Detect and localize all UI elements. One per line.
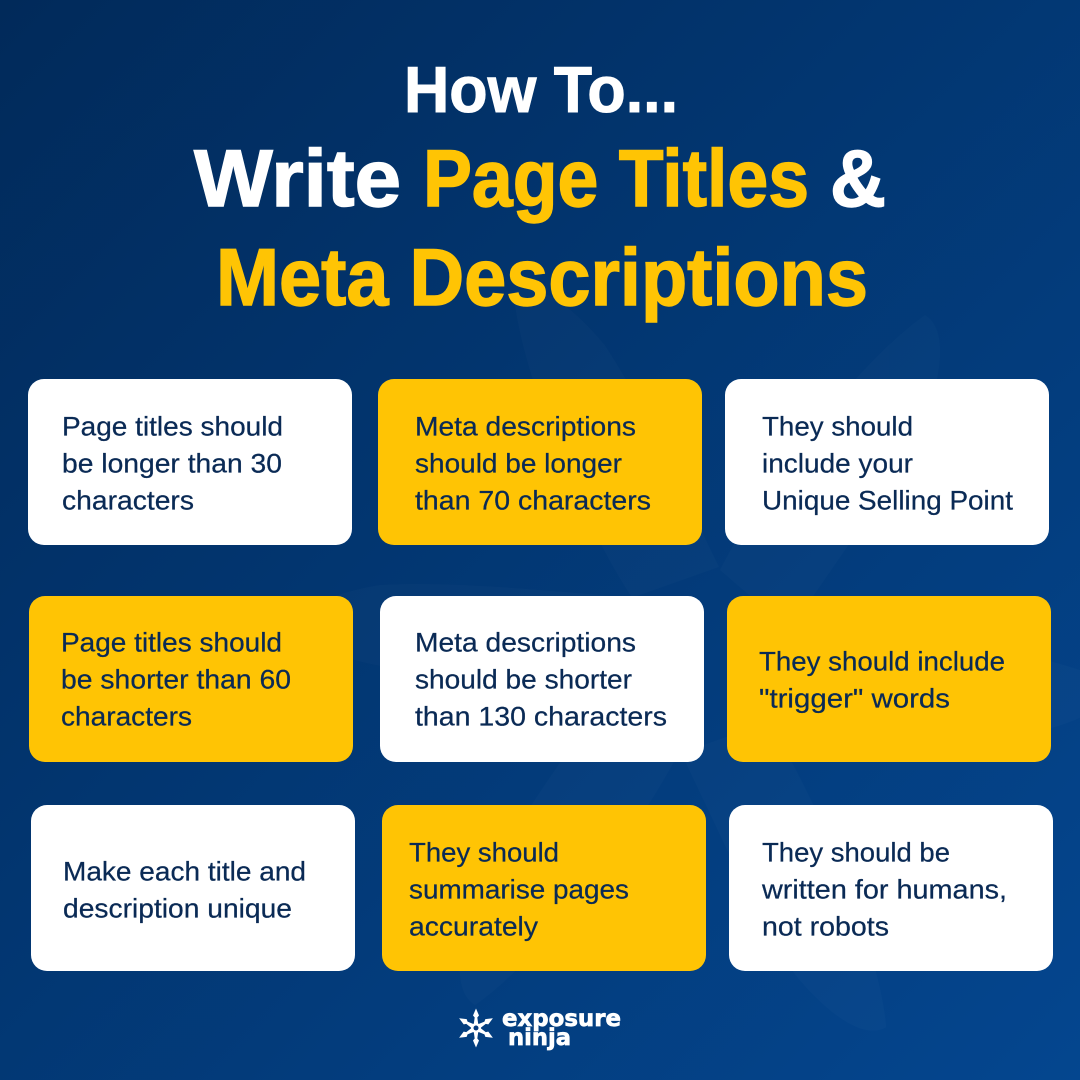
logo: exposure ninja (458, 1006, 621, 1051)
title word: Write: Write (194, 134, 401, 224)
card: meta descriptions shorter than 130: Meta descriptions (415, 628, 636, 658)
card: trigger words: They should include (759, 646, 1005, 676)
card: meta descriptions shorter than 130: than 130 characters (415, 702, 667, 732)
title line: Meta Descriptions: Meta Descriptions (216, 233, 868, 323)
icon: shuriken (458, 1008, 494, 1048)
card: page titles longer than 30 (28, 379, 352, 545)
card: summarise accurately: accurately (409, 912, 539, 942)
card: unique selling point (725, 379, 1049, 545)
title words: Page Titles: Page Titles (423, 134, 809, 224)
card: page titles shorter than 60: characters (61, 702, 192, 732)
card: unique title and description: description unique (63, 894, 292, 924)
card: summarise accurately: summarise pages (409, 874, 629, 904)
title line: How To: How To... (404, 53, 678, 126)
card: summarise accurately: They should (409, 838, 559, 868)
card: written for humans: not robots (762, 912, 889, 942)
card: meta descriptions longer than 70: than 70 characters (415, 486, 651, 516)
card: meta descriptions longer than 70: should be longer (415, 448, 622, 478)
card: unique title and description (31, 805, 355, 971)
card: unique title and description: Make each title and (63, 856, 306, 886)
card: meta descriptions shorter than 130: should be shorter (415, 664, 632, 694)
card: unique selling point: Unique Selling Point (762, 486, 1014, 516)
logo wordmark: ninja: ninja (508, 1025, 571, 1051)
logo wordmark: exposure: exposure (502, 1006, 621, 1032)
card: page titles shorter than 60: Page titles should (61, 628, 282, 658)
card: unique selling point: They should (762, 412, 913, 442)
card: written for humans (729, 805, 1053, 971)
title symbol: ampersand: & (830, 134, 886, 224)
card: unique selling point: include your (762, 448, 913, 478)
card: summarise accurately (382, 805, 706, 971)
card: page titles longer than 30: be longer than 30 (62, 448, 282, 478)
card: trigger words (727, 596, 1051, 762)
watermark: shuriken (281, 279, 1080, 1041)
card: written for humans: They should be (762, 838, 950, 868)
title (194, 53, 886, 323)
card: page titles shorter than 60: be shorter than 60 (61, 664, 291, 694)
card: meta descriptions longer than 70 (378, 379, 702, 545)
card: meta descriptions shorter than 130 (380, 596, 704, 762)
card: meta descriptions longer than 70: Meta descriptions (415, 412, 636, 442)
card: page titles shorter than 60 (29, 596, 353, 762)
card: page titles longer than 30: Page titles should (62, 412, 283, 442)
card: written for humans: written for humans, (761, 874, 1007, 904)
card: page titles longer than 30: characters (62, 486, 194, 516)
card: trigger words: "trigger" words (759, 684, 950, 714)
